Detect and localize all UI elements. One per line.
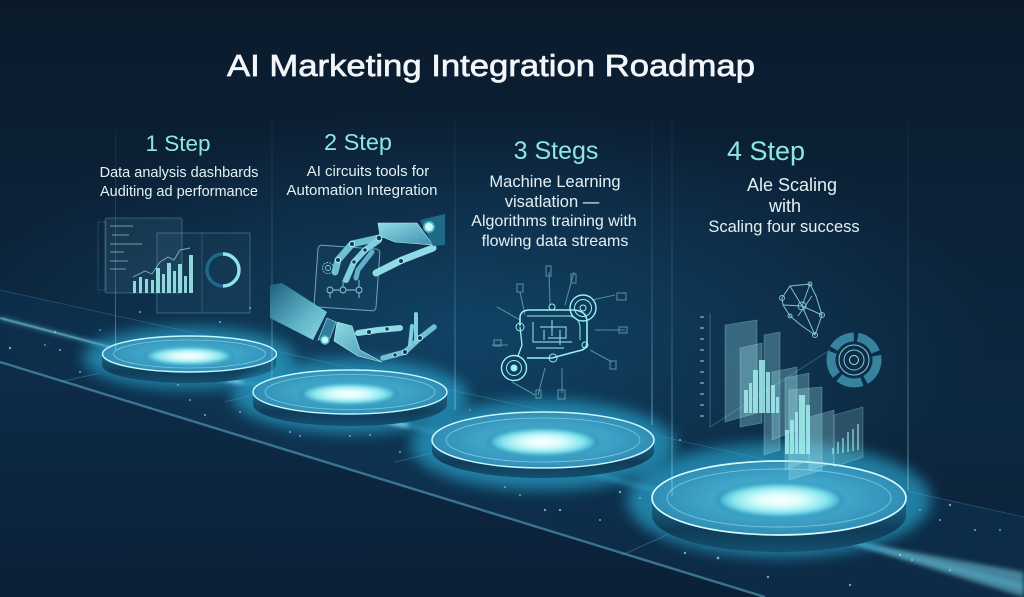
- step 4 heading: 4 Step: [727, 136, 805, 166]
- step 3 description: Algorithms training with: [471, 213, 637, 230]
- step 3 description: Machine Learning: [489, 173, 621, 191]
- step 3 description: visatlation —: [505, 193, 600, 211]
- step 3 heading: 3 Stegs: [514, 137, 598, 165]
- platform 2: [232, 359, 468, 433]
- icon: dashboard with bar chart and donut: [98, 218, 250, 313]
- glass panel 4 edges: [672, 120, 908, 496]
- glass panel 2 edges: [455, 120, 457, 410]
- data particles: [9, 307, 1001, 586]
- icon: machine learning circuit: [492, 266, 627, 399]
- roadmap track: [0, 290, 1024, 597]
- step 4 description: Ale Scaling: [747, 175, 837, 195]
- step 2 description: Automation Integration: [287, 182, 437, 199]
- icon: scaling charts and network: [700, 282, 877, 480]
- panel: step 2: [232, 120, 468, 433]
- glass panel 3 edges: [455, 120, 652, 425]
- step 3 description: flowing data streams: [482, 233, 628, 250]
- upper robot hand: [335, 214, 445, 280]
- step 1 description: Auditing ad performance: [100, 184, 258, 200]
- panel: step 4: [627, 120, 931, 557]
- step 4 description: with: [768, 196, 801, 216]
- step 2 description: AI circuits tools for: [307, 163, 429, 180]
- title: AI Marketing Integration Roadmap: [227, 48, 755, 83]
- step 1 heading: 1 Step: [145, 131, 211, 156]
- panel: step 1: [83, 120, 295, 395]
- platform 3: [411, 400, 675, 490]
- panel: step 3: [411, 120, 675, 490]
- icon: robot hands with circuit tablet: [270, 214, 445, 362]
- platform 4: [627, 443, 931, 557]
- glass panel 1 edges: [116, 120, 272, 395]
- lower robot hand: [270, 283, 434, 362]
- step 1 description: Data analysis dashbards: [100, 165, 258, 181]
- step 2 heading: 2 Step: [324, 129, 392, 155]
- platform 1: [83, 327, 295, 389]
- step 4 description: Scaling four success: [708, 218, 860, 236]
